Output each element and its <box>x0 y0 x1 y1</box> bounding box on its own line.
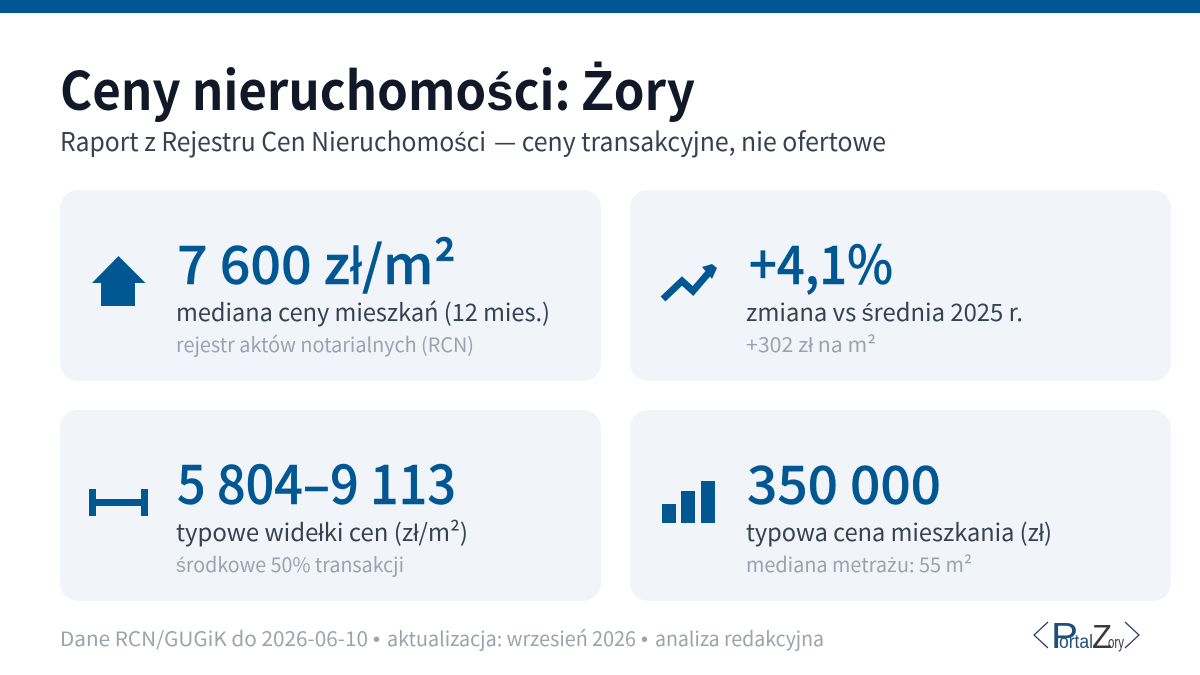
panel: median price <box>60 190 601 381</box>
typical price label: typowa cena mieszkania (zł) <box>746 513 1052 548</box>
median price value: 7 600 zł/m² <box>177 224 456 300</box>
footer source note <box>60 623 824 652</box>
icon: rising trend arrow <box>663 264 717 299</box>
typical price value: 350 000 <box>747 444 941 520</box>
footer source note: • <box>373 629 380 651</box>
icon: bar chart <box>662 481 715 523</box>
top bar <box>0 0 1200 13</box>
footer source note: • <box>641 629 648 651</box>
footer source note: analiza redakcyjna <box>655 623 824 652</box>
price change detail: +302 zł na m² <box>746 329 876 358</box>
subtitle: — ceny transakcyjne, nie ofertowe <box>494 122 886 159</box>
icon: range bracket <box>89 489 148 516</box>
price range label: typowe widełki cen (zł/m²) <box>176 513 468 548</box>
subtitle <box>60 122 886 159</box>
logo: Portal Zory: ory <box>1108 633 1124 652</box>
typical price detail: mediana metrażu: 55 m² <box>746 549 972 578</box>
price change label: zmiana vs średnia 2025 r. <box>746 293 1023 328</box>
logo: Portal Zory: ortal <box>1059 632 1093 653</box>
title: Ceny nieruchomości: Żory <box>60 50 695 126</box>
logo: Portal Zory: P <box>1051 615 1078 656</box>
median price source: rejestr aktów notarialnych (RCN) <box>176 329 474 358</box>
panel: price change <box>630 190 1171 381</box>
price change value: +4,1% <box>749 224 893 300</box>
price range detail: środkowe 50% transakcji <box>176 549 404 578</box>
footer source note: aktualizacja: wrzesień 2026 <box>387 623 636 652</box>
panel: price range <box>60 410 601 601</box>
logo: Portal Zory: Z <box>1092 618 1112 655</box>
logo: Portal Zory <box>1034 615 1139 656</box>
panel: typical price <box>630 410 1171 601</box>
subtitle: Raport z Rejestru Cen Nieruchomości <box>60 122 486 159</box>
icon: house <box>92 256 146 306</box>
price range value: 5 804–9 113 <box>177 444 456 520</box>
footer source note: Dane RCN/GUGiK do 2026-06-10 <box>60 623 368 652</box>
median price label: mediana ceny mieszkań (12 mies.) <box>176 293 550 328</box>
